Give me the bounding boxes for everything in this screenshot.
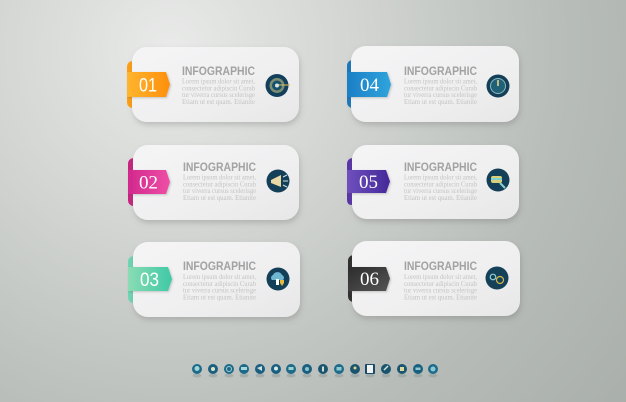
ribbon 02 (128, 170, 170, 194)
body text 05 (404, 174, 477, 202)
small icon 3 (224, 364, 234, 378)
card 03 (133, 242, 300, 317)
body text 01: tur viverra cursus scelerisge (182, 91, 255, 99)
tab strip 02 (128, 158, 133, 206)
small icon 16 (428, 364, 438, 378)
small icon 4 (239, 364, 249, 378)
card 05 (352, 145, 519, 219)
tab strip 06 (348, 255, 353, 302)
icon: gears (486, 266, 508, 290)
number 02: 02 (139, 172, 158, 194)
body text 05: consectetur adipiscin Curab (404, 180, 477, 188)
small icon 1 (192, 364, 202, 378)
panel: step 04 (347, 46, 519, 122)
panel: step 03 (128, 242, 300, 317)
body text 06: tur viverra cursus scelerisge (404, 286, 477, 294)
ribbon 05 (347, 170, 390, 193)
icon: target (266, 74, 290, 97)
body text 04: consectetur adipiscin Curab (404, 84, 477, 92)
body text 05: Lorem ipsum dolor sit amet, (404, 174, 477, 182)
body text 03: Lorem ipsum dolor sit amet, (183, 273, 256, 281)
body text 01: Etiam ut est quam. Etianite (182, 98, 255, 106)
small icon 2 (208, 364, 218, 378)
body text 02: consectetur adipiscin Curab (183, 180, 256, 188)
body text 03 (183, 273, 256, 302)
ribbon 01 (127, 72, 170, 97)
body text 05: tur viverra cursus scelerisge (404, 187, 477, 195)
small icon 14 (397, 364, 407, 378)
small icon 10 (334, 364, 344, 378)
tab strip 04 (347, 60, 352, 108)
body text 03: tur viverra cursus scelerisge (183, 286, 256, 294)
card 04 (351, 46, 519, 122)
body text 02: Lorem ipsum dolor sit amet, (183, 174, 256, 182)
body text 04 (404, 78, 477, 106)
number 03: 03 (140, 270, 159, 291)
heading 02: INFOGRAPHIC (183, 162, 256, 174)
body text 03: Etiam ut est quam. Etianite (183, 294, 256, 302)
number 04: 04 (360, 75, 380, 96)
tab strip 05 (347, 158, 352, 205)
panel: step 06 (348, 241, 520, 316)
card 01 (132, 47, 299, 122)
ribbon 04 (347, 72, 391, 97)
small icon 7 (286, 364, 296, 378)
body text 04: Etiam ut est quam. Etianite (404, 98, 477, 106)
body text 01: consectetur adipiscin Curab (182, 84, 255, 92)
heading 05: INFOGRAPHIC (404, 162, 477, 174)
icon: magnifier (486, 168, 510, 192)
card 02 (133, 145, 299, 220)
number 01: 01 (139, 76, 157, 96)
small icon 9 (318, 364, 328, 378)
small icon 13 (381, 364, 391, 378)
icon: cloud (266, 268, 290, 290)
heading 04: INFOGRAPHIC (404, 66, 477, 78)
number 05: 05 (359, 172, 378, 193)
body text 04: Lorem ipsum dolor sit amet, (404, 78, 477, 86)
small icon 12 (365, 364, 375, 378)
heading 03: INFOGRAPHIC (183, 261, 256, 273)
body text 01 (182, 78, 255, 106)
body text 04: tur viverra cursus scelerisge (404, 91, 477, 99)
card 06 (352, 241, 520, 316)
body text 02 (183, 174, 256, 202)
tab strip 01 (127, 61, 132, 108)
panel: step 01 (127, 47, 299, 122)
ribbon 06 (348, 267, 390, 291)
body text 06 (404, 273, 477, 302)
small icon 15 (413, 364, 423, 378)
small icon 8 (302, 364, 312, 378)
body text 06: Etiam ut est quam. Etianite (404, 294, 477, 302)
heading 06: INFOGRAPHIC (404, 261, 477, 273)
body text 03: consectetur adipiscin Curab (183, 280, 256, 288)
body text 02: tur viverra cursus scelerisge (183, 187, 256, 195)
ribbon 03 (128, 267, 172, 291)
small icon 11 (350, 364, 360, 378)
panel: step 02 (128, 145, 299, 220)
number 06: 06 (360, 269, 379, 290)
body text 01: Lorem ipsum dolor sit amet, (182, 78, 255, 86)
icon row (192, 364, 438, 378)
panel: step 05 (347, 145, 519, 219)
body text 06: Lorem ipsum dolor sit amet, (404, 273, 477, 281)
body text 02: Etiam ut est quam. Etianite (183, 194, 256, 202)
icon: gauge (486, 74, 510, 98)
body text 05: Etiam ut est quam. Etianite (404, 194, 477, 202)
small icon 5 (255, 364, 265, 378)
tab strip 03 (128, 256, 133, 303)
heading 01: INFOGRAPHIC (182, 66, 255, 78)
small icon 6 (271, 364, 281, 378)
icon: megaphone (266, 170, 290, 192)
body text 06: consectetur adipiscin Curab (404, 280, 477, 288)
